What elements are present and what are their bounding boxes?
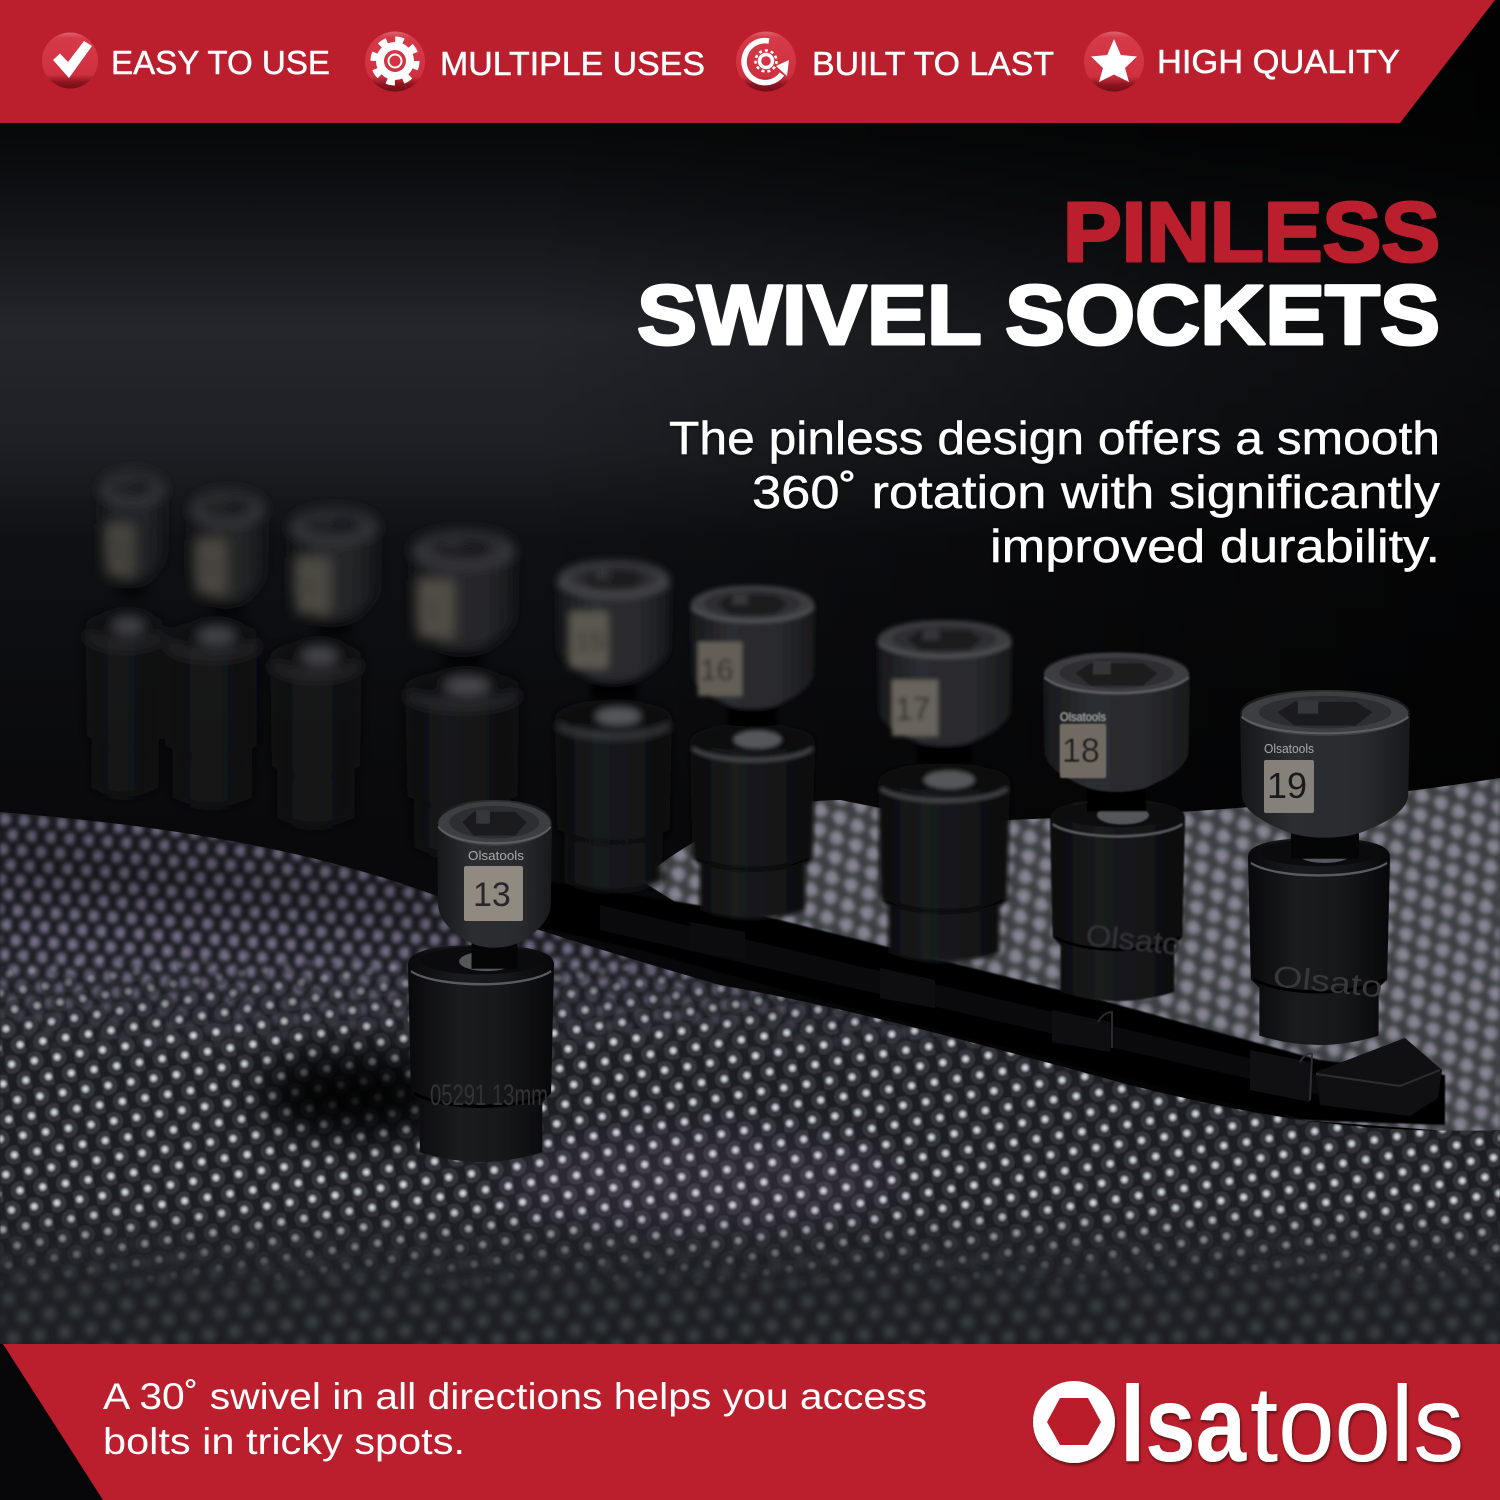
rail shadow and storage rail [530,880,1445,1125]
socket 19 [1240,690,1410,1045]
fabric mat behind the rail [644,778,1500,1131]
socket 18 [1043,652,1190,1001]
rear socket 2 [165,490,265,806]
swivel description: A 30˚ swivel in all directions helps you access [103,1376,927,1417]
description text: improved durability. [990,520,1440,572]
logo: Olsatools: lsa [1120,1363,1247,1484]
icon: check mark button [42,32,98,88]
socket 19 size plate: 19 [1267,765,1307,806]
rear socket 1: 1 [113,538,125,563]
description text: The pinless design offers a smooth [669,412,1440,464]
socket 19 engraving: Olsato [1271,960,1384,1004]
socket 19 brand mark: Olsatools [1264,741,1314,756]
swivel description [103,1376,927,1462]
socket 18 engraving: Olsato [1084,919,1182,962]
socket 16: 16 [700,654,733,687]
rear socket 4: 1 [426,597,439,624]
swivel description: bolts in tricky spots. [103,1421,465,1462]
description text: 360˚ rotation with significantly [752,466,1440,518]
rear socket 3: 1 [303,574,315,599]
socket 18 size plate [1060,724,1106,778]
socket 15 [555,560,672,891]
rear socket 4 [405,530,520,856]
socket 13 size plate [464,866,523,921]
socket 13 brand mark: Olsatools [468,848,525,863]
rear socket 1 [85,470,165,796]
socket 17 [877,620,1012,962]
logo: Olsatools [1033,1363,1464,1484]
rear socket 2: 1 [204,554,216,579]
socket 18 size plate: 18 [1062,732,1100,770]
socket 19 size plate [1264,760,1314,813]
label: high quality: HIGH QUALITY [1157,43,1400,80]
blurred rear sockets [85,470,520,856]
socket 17: 17 [895,691,931,727]
label: built to last: BUILT TO LAST [812,45,1054,82]
description text [669,412,1440,572]
logo: Olsatools: tools [1250,1363,1464,1484]
label: multiple uses: MULTIPLE USES [440,45,705,82]
icon: star button [1084,32,1144,92]
heading [637,185,1440,362]
top banner [0,0,1495,123]
heading line: swivel sockets: SWIVEL SOCKETS [637,268,1440,362]
heading line: pinless: PINLESS [1063,185,1440,279]
logo: Olsatools: O [1046,1393,1105,1478]
socket 13 size plate: 13 [473,876,511,914]
socket 18 brand mark: Olsatools [1060,710,1106,724]
socket 16 [690,585,815,919]
socket 13 engraving: 05291 13mm [430,1079,548,1112]
socket 13 foreground [408,800,554,1162]
socket 15: 15 [575,626,604,656]
bottom banner [3,1344,1500,1500]
rear socket 3 [270,508,378,826]
label: easy to use: EASY TO USE [111,44,330,81]
icon: rotating gear button [736,32,796,92]
icon: gear button [365,32,425,92]
fabric mat foreground [0,780,1500,1350]
rail end clip [690,922,1442,1116]
